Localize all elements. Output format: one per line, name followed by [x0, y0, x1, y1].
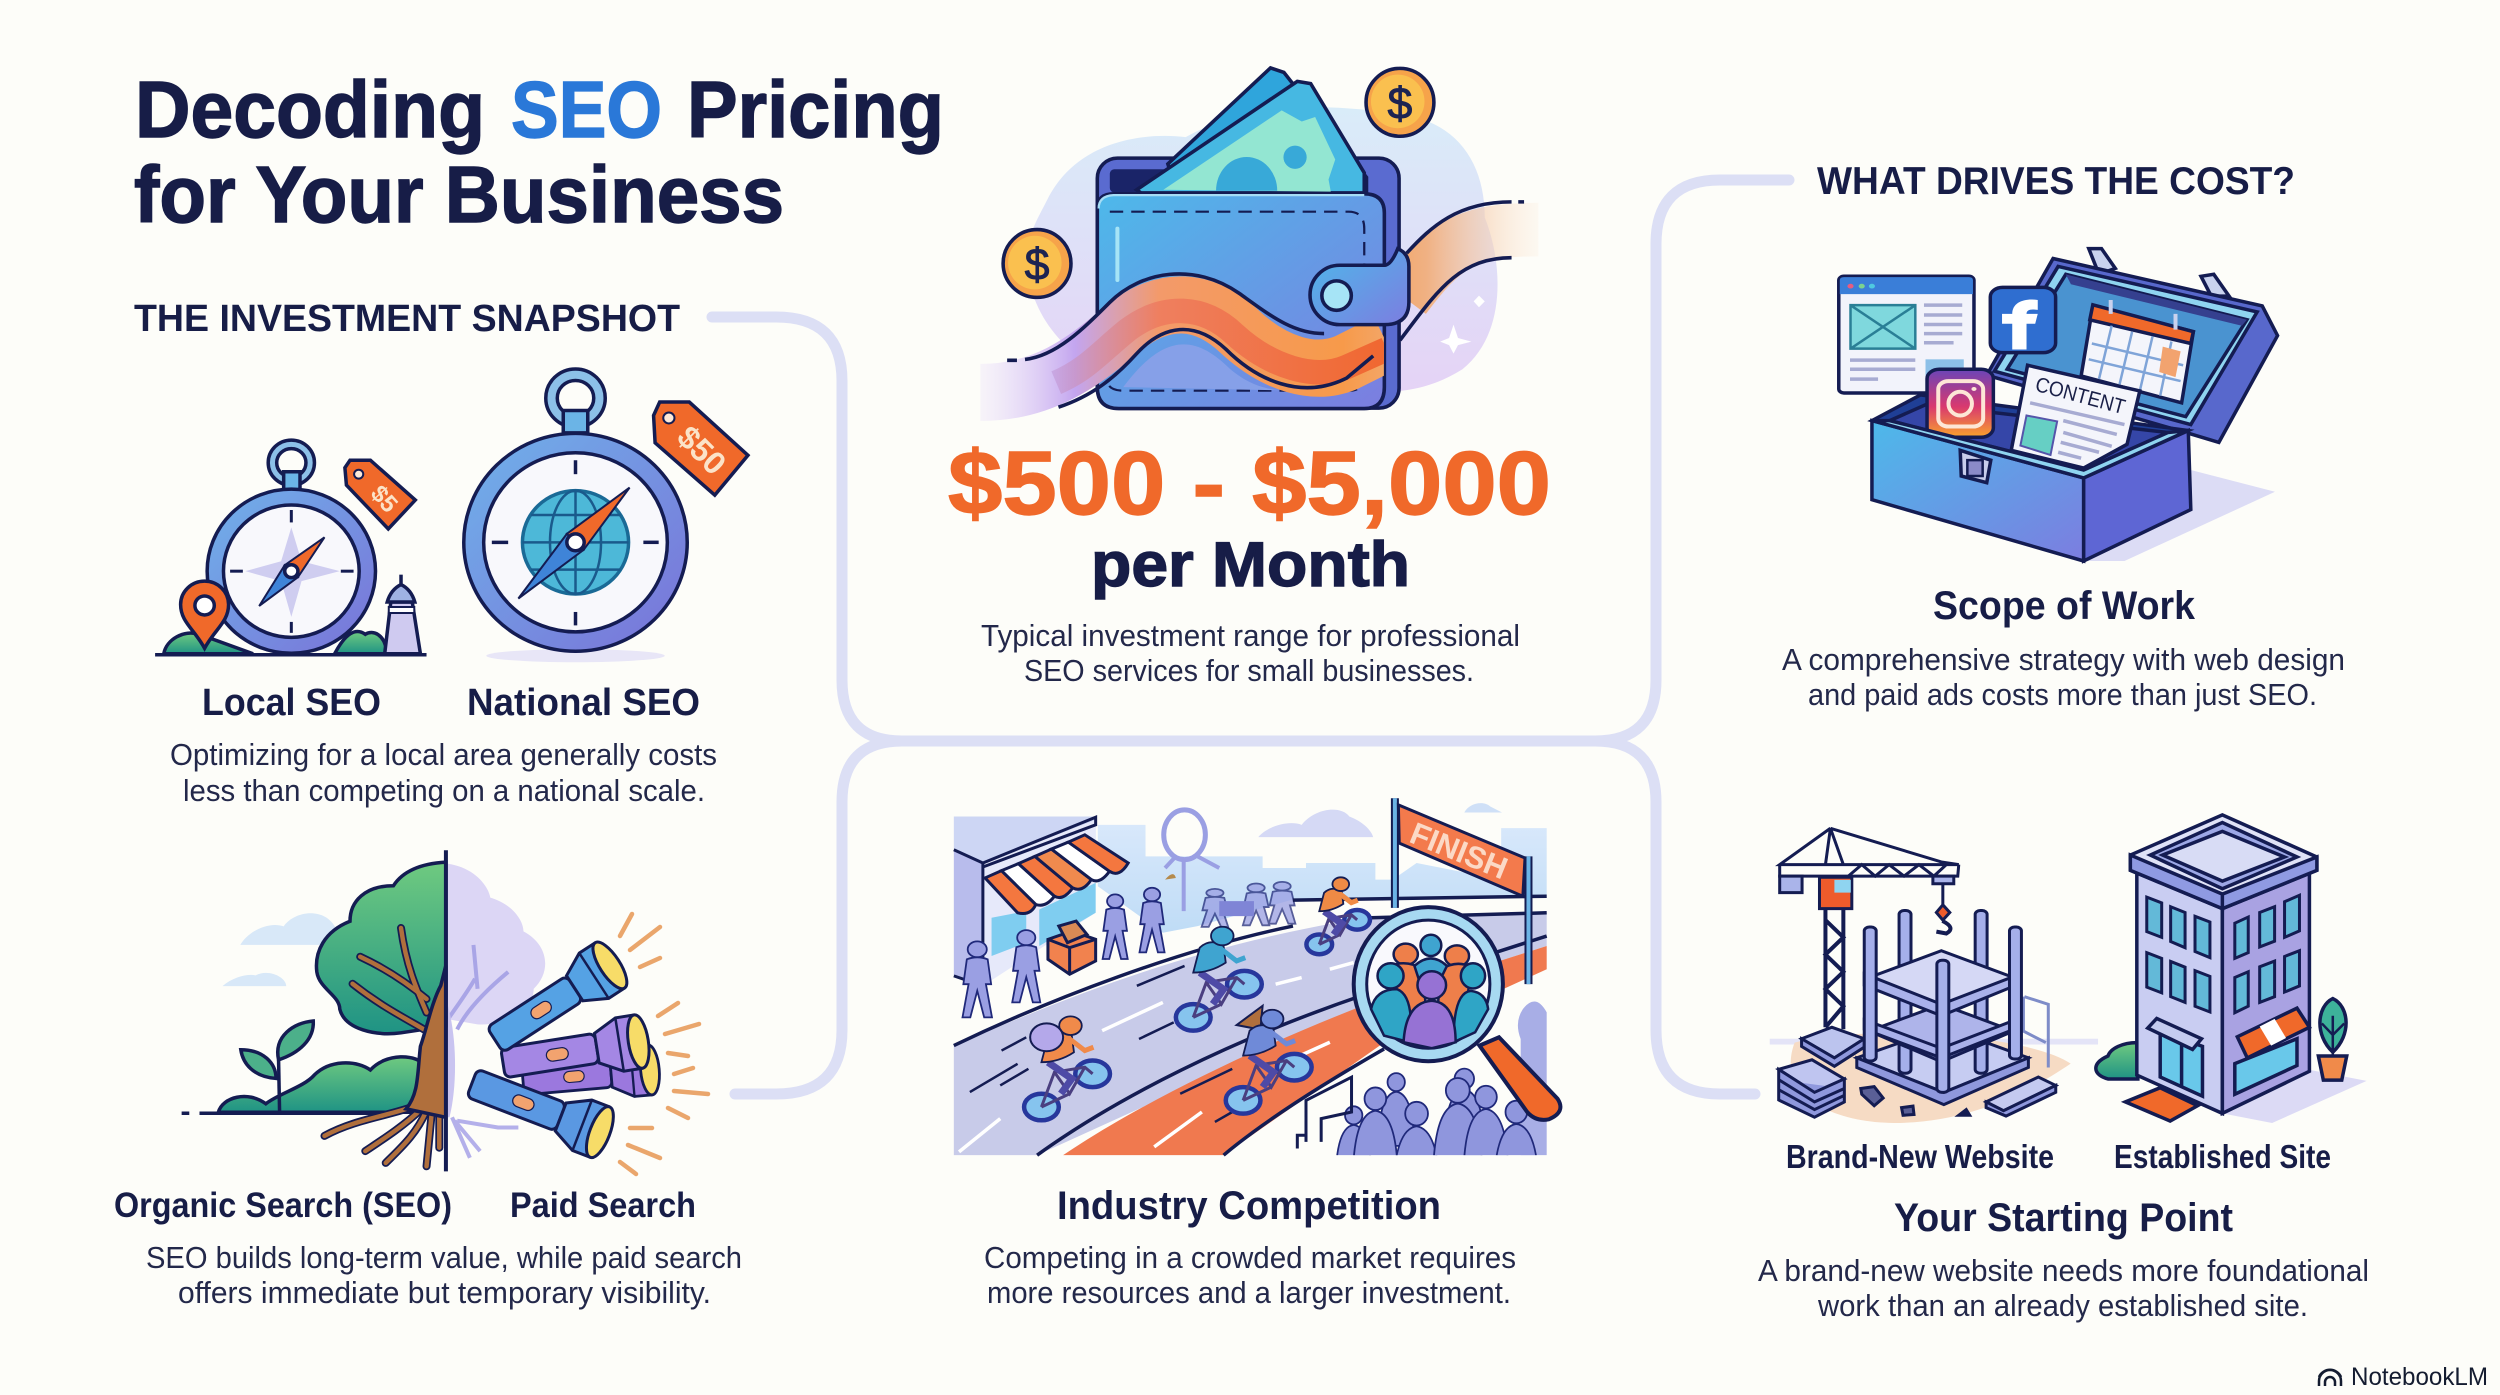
icon: wallet with cash, coins and ribbon: $ [1025, 241, 1050, 290]
icon: established building with awning and plant [2096, 815, 2367, 1123]
heading: your starting point: Your Starting Point [1894, 1196, 2233, 1240]
finish banner label: FINISH [1405, 816, 1513, 886]
label: Paid Search: Paid Search [510, 1186, 696, 1225]
panel: your starting point [1758, 815, 2369, 1323]
text: competition description [984, 1240, 1516, 1310]
text: scope description: A comprehensive strategy with web design [1782, 642, 2345, 677]
text: local vs national description: Optimizing for a local area generally costs [170, 737, 717, 772]
icon: open toolbox with web, social and content items [1839, 249, 2278, 561]
text: typical investment description [981, 618, 1520, 688]
panel: industry competition [954, 798, 1560, 1310]
text: starting point description [1758, 1253, 2369, 1323]
title: Pricing [687, 65, 944, 154]
title: SEO [511, 65, 662, 154]
per month: per Month [1091, 530, 1410, 600]
panel: central price range [948, 68, 1551, 688]
connector lines linking the panels [712, 180, 1789, 1094]
icon: half tree, organic growth [182, 850, 545, 1171]
panel: what drives the cost [1782, 160, 2345, 712]
icon: wallet with cash, coins and ribbon [980, 68, 1538, 409]
watermark: NotebookLM: NotebookLM [2351, 1363, 2488, 1391]
text: scope description: and paid ads costs more than just SEO. [1808, 677, 2317, 712]
title: for Your Business [134, 150, 784, 239]
text: starting point description: work than an already established site. [1817, 1288, 2308, 1323]
text: typical investment description: Typical investment range for professional [981, 618, 1520, 653]
label: brand-new website: Brand-New Website [1786, 1138, 2054, 1175]
text: local vs national description: less than competing on a national scale. [183, 773, 705, 808]
icon: building under construction with crane [1770, 828, 2098, 1123]
text: typical investment description: SEO services for small businesses. [1024, 653, 1474, 688]
text: organic vs paid description: offers immediate but temporary visibility. [178, 1275, 711, 1310]
section heading: what drives the cost: WHAT DRIVES THE COST? [1817, 160, 2295, 203]
title [134, 65, 944, 239]
text: competition description: Competing in a crowded market requires [984, 1240, 1516, 1275]
text: scope description [1782, 642, 2345, 712]
heading: industry competition: Industry Competition [1057, 1184, 1441, 1228]
price tag label: $50: $50 [670, 419, 733, 482]
text: organic vs paid description [146, 1240, 742, 1310]
icon: wallet with cash, coins and ribbon: $ [1388, 79, 1413, 128]
price tag label: $5: $5 [365, 480, 403, 518]
icon: four flashlights with light rays [462, 914, 708, 1174]
text: local vs national description [170, 737, 717, 808]
icon: local SEO compass with pin, tag and tower [155, 444, 427, 655]
text: starting point description: A brand-new website needs more foundational [1758, 1253, 2369, 1288]
label: Organic Search (SEO): Organic Search (SEO) [114, 1186, 452, 1225]
label: National SEO: National SEO [467, 682, 700, 724]
panel: the investment snapshot [114, 298, 748, 1310]
price range: $500 - $5,000 [948, 434, 1551, 534]
illustration: cyclists racing to finish line [954, 798, 1560, 1197]
content card label: CONTENT [2033, 373, 2128, 419]
label: established site: Established Site [2114, 1138, 2331, 1175]
text: competition description: more resources and a larger investment. [987, 1275, 1511, 1310]
title: Decoding [135, 65, 485, 154]
heading: scope of work: Scope of Work [1933, 584, 2196, 628]
text: organic vs paid description: SEO builds long-term value, while paid search [146, 1240, 742, 1275]
icon: NotebookLM logo [2319, 1370, 2341, 1386]
label: Local SEO: Local SEO [202, 682, 381, 724]
section heading: snapshot: THE INVESTMENT SNAPSHOT [134, 298, 680, 340]
icon: national SEO compass with globe and tag [464, 375, 748, 662]
